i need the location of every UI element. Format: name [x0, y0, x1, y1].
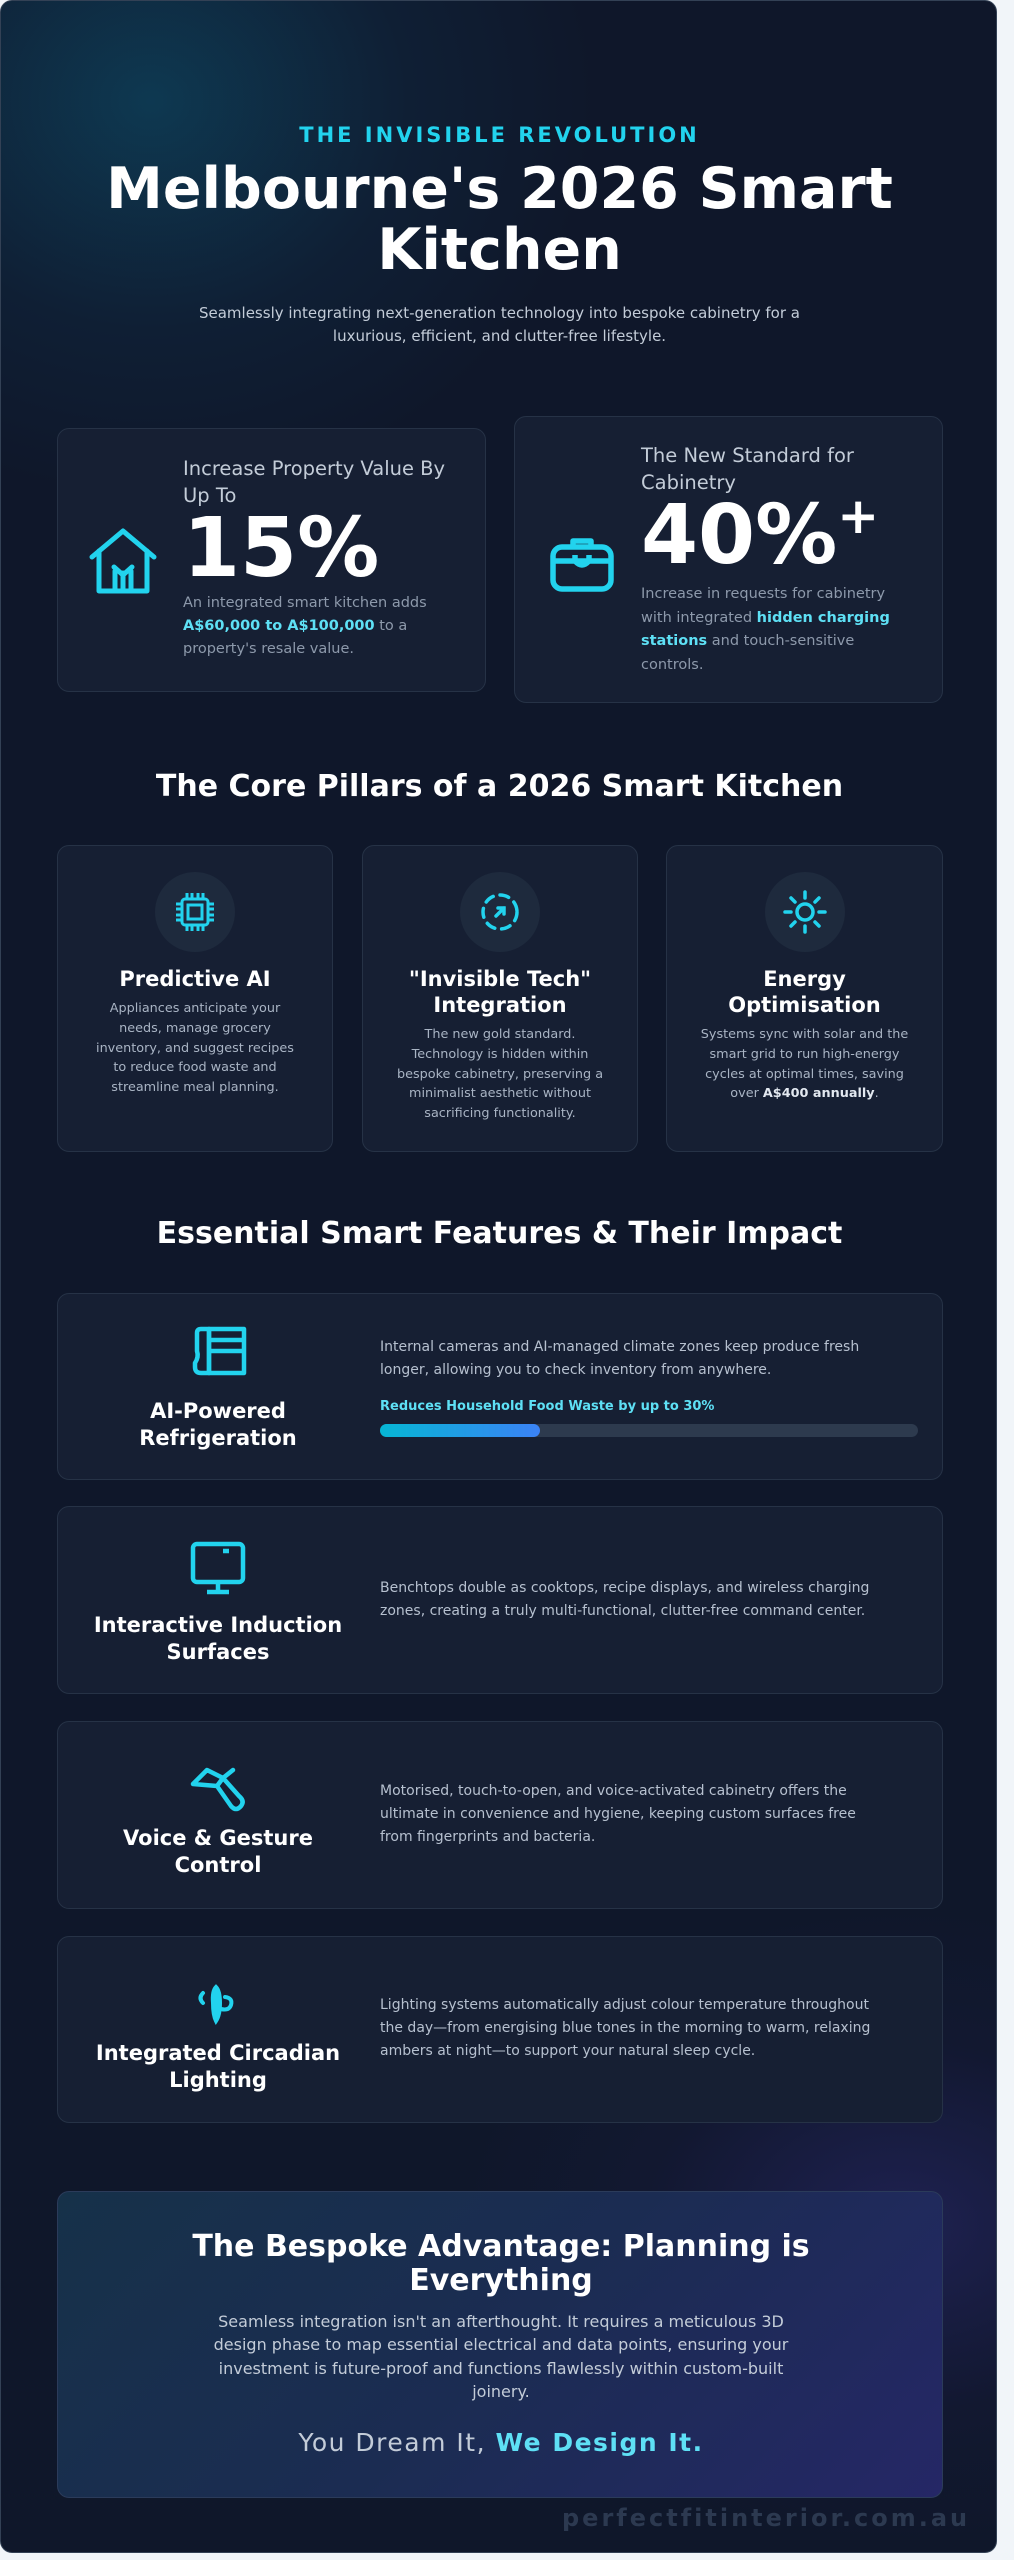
- feature: induction: [57, 1506, 943, 1694]
- feature: voice gesture: Control: [175, 1853, 261, 1877]
- stat text: Increase in requests for cabinetry with integrated hidden charging stations and touch-sensitive controls.: [641, 586, 890, 672]
- eyebrow: THE INVISIBLE REVOLUTION: [299, 123, 700, 147]
- stat text: An integrated smart kitchen adds A$60,000 to A$100,000 to a property's resale value.: [183, 595, 427, 657]
- pillar: invisible tech: Integration: [433, 993, 567, 1017]
- heading: core pillars: The Core Pillars of a 2026 Smart Kitchen: [156, 769, 843, 804]
- stat card: property value: [57, 428, 486, 692]
- icon: gesture: [190, 1768, 245, 1812]
- feature: circadian: Lighting: [169, 2068, 267, 2092]
- heading: features: Essential Smart Features & Their Impact: [157, 1216, 842, 1251]
- icon: dashed scan: [460, 872, 540, 952]
- pillar: predictive AI: Predictive AI: [119, 967, 271, 991]
- feature: circadian: [57, 1936, 943, 2123]
- callout heading: The Bespoke Advantage: Planning is Everything: [192, 2229, 810, 2298]
- feature: refrigeration: AI-Powered: [150, 1399, 286, 1423]
- callout: bespoke advantage: [57, 2191, 943, 2498]
- stat card: cabinetry: [514, 416, 943, 703]
- icon: sun: [764, 872, 844, 952]
- pillar: energy: Energy: [763, 967, 846, 991]
- feature: refrigeration: Internal cameras and AI-managed climate zones keep produce fresh longer, allowing you to check inventory from anywhere.: [380, 1339, 859, 1378]
- progress bar: [380, 1399, 918, 1437]
- subtitle: Seamlessly integrating next-generation technology into bespoke cabinetry for a luxurious, efficient, and clutter-free lifestyle.: [199, 304, 800, 345]
- feature: refrigeration: [57, 1293, 943, 1480]
- icon: chip: [155, 872, 235, 952]
- pillar: energy: [666, 845, 943, 1152]
- feature: induction: Benchtops double as cooktops, recipe displays, and wireless charging zones, creating a truly multi-functional, clutter-free command center.: [380, 1580, 869, 1619]
- feature: voice gesture: [57, 1721, 943, 1909]
- stat text: Increase Property Value By Up To: [183, 457, 445, 507]
- pillar: invisible tech: "Invisible Tech": [409, 967, 591, 991]
- stat text: The New Standard for Cabinetry: [641, 444, 854, 494]
- pillar: invisible tech: [362, 845, 638, 1152]
- watermark: perfectfitinterior.com.au: [562, 2504, 970, 2532]
- title: Melbourne's 2026 Smart: [106, 156, 893, 222]
- feature: induction: Surfaces: [167, 1640, 269, 1664]
- progress bar: Reduces Household Food Waste by up to 30%: [380, 1399, 714, 1414]
- title: Kitchen: [377, 217, 622, 283]
- icon: monitor: [190, 1542, 246, 1594]
- pillar: energy: Optimisation: [728, 993, 881, 1017]
- stat text: [183, 457, 445, 657]
- feature: voice gesture: Motorised, touch-to-open, and voice-activated cabinetry offers the ultimate in convenience and hygiene, keeping custom surfaces free from fingerprints and bacteria.: [380, 1783, 856, 1845]
- stat text: 40%+: [641, 487, 879, 583]
- feature: induction: Interactive Induction: [94, 1613, 342, 1637]
- pillar: invisible tech: The new gold standard. Technology is hidden within bespoke cabinetry, preserving a minimalist aesthetic without sacrificing functionality.: [397, 1027, 603, 1121]
- feature: voice gesture: Voice & Gesture: [123, 1826, 313, 1850]
- feature: circadian: Lighting systems automatically adjust colour temperature throughout the day—from energising blue tones in the morning to warm, relaxing ambers at night—to support your natural sleep cycle.: [380, 1997, 870, 2059]
- icon: fridge: [192, 1326, 246, 1376]
- stat text: [640, 444, 890, 672]
- stat text: 15%: [183, 501, 379, 596]
- title: [106, 156, 893, 283]
- icon: light: [198, 1984, 234, 2025]
- feature: refrigeration: Refrigeration: [139, 1426, 297, 1450]
- callout text: Seamless integration isn't an afterthought. It requires a meticulous 3D design phase to map essential electrical and data points, ensuring your investment is future-proof and functions flawlessly within custom-built joinery.: [214, 2312, 788, 2401]
- pillar: predictive AI: Appliances anticipate your needs, manage grocery inventory, and suggest recipes to reduce food waste and streamline meal planning.: [96, 1001, 294, 1095]
- icon: house: [90, 528, 156, 594]
- tagline: You Dream It, We Design It.: [298, 2428, 704, 2457]
- pillar: energy: Systems sync with solar and the smart grid to run high-energy cycles at optimal times, saving over A$400 annually.: [701, 1027, 908, 1101]
- icon: toolbox: [550, 538, 614, 592]
- pillar: predictive AI: [57, 845, 333, 1152]
- feature: circadian: Integrated Circadian: [96, 2041, 340, 2065]
